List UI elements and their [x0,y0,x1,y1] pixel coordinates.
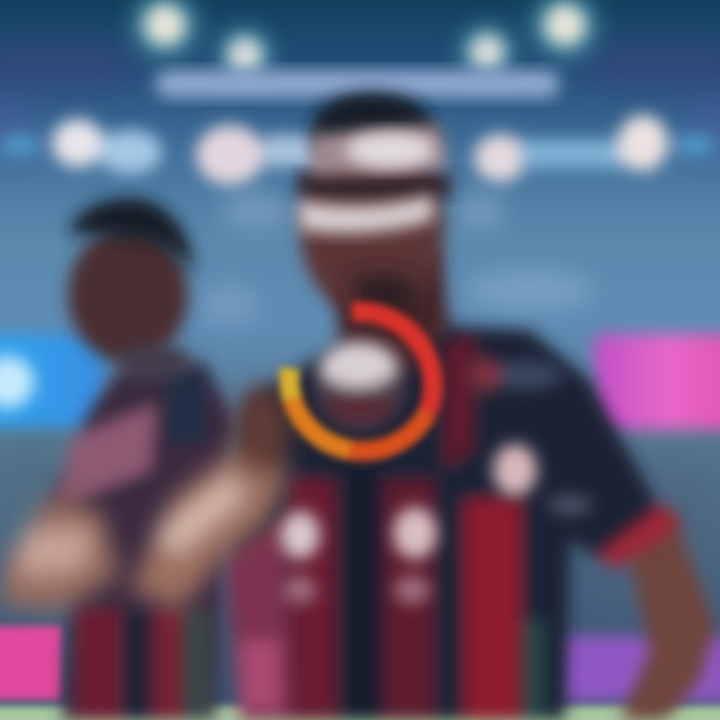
glowing light row [0,115,715,185]
blue advertising board [0,334,105,428]
main player: eye shadow band [298,172,450,198]
main player: right arm [620,510,715,720]
stadium light halos [133,0,597,81]
pink advertising board [594,334,720,430]
left player: jersey [50,362,235,720]
ring chart [289,312,433,451]
bottom left pink board [0,626,62,700]
main player: hair [310,92,437,150]
left player: arm [0,495,120,612]
left player: head [68,198,195,380]
bottom right purple board [555,636,720,702]
left player [0,198,235,720]
ring chart: segments [289,312,433,451]
main player: raised hand and forearm [130,385,290,610]
main player [130,92,715,720]
main player: upper band [310,125,448,175]
purple haze bands [0,50,720,140]
ring chart: inner blob [314,339,406,431]
stadium lights: top row [145,5,585,72]
lower stand haze [0,450,720,610]
pitch strip [0,706,720,720]
main player: jersey highlights [280,357,592,604]
main player: white headband [298,194,434,233]
main player: jersey [225,325,680,720]
glowing banner bar [155,70,560,98]
faint background shapes [200,192,595,325]
main player: neck and head [298,92,450,380]
